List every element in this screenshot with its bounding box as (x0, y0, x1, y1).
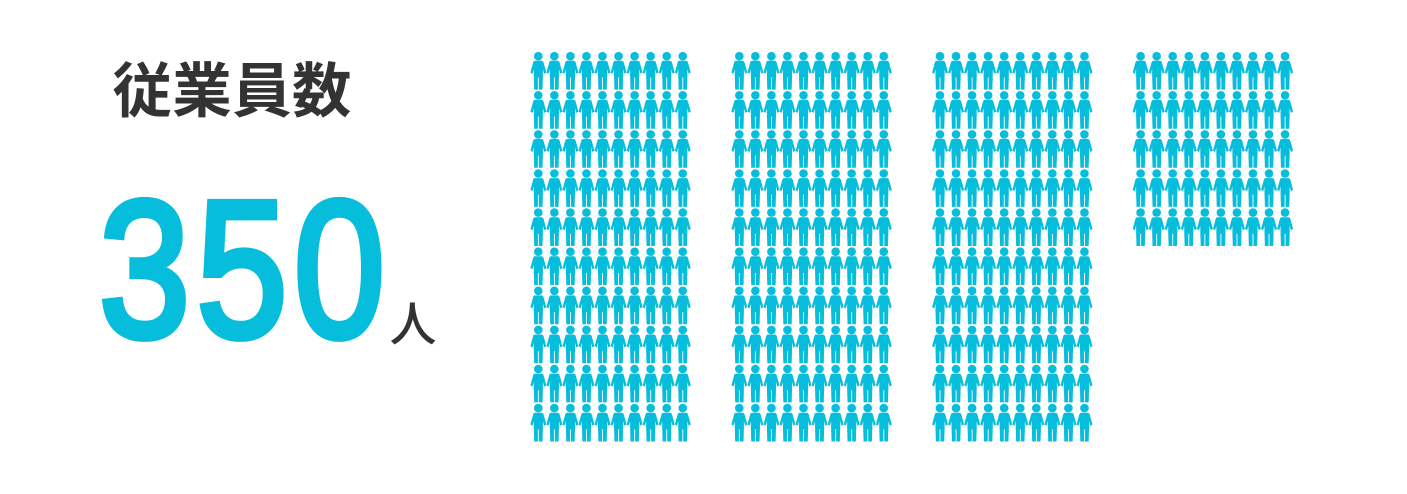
heading: employee count: 従業員数 (112, 58, 352, 125)
pictogram: block of 100 people, first (530, 52, 691, 442)
pictogram: block of 50 people (1133, 52, 1293, 246)
pictogram: block of 100 people, third (932, 52, 1092, 442)
big number: 350: 350 (99, 161, 385, 379)
pictogram: block of 100 people, second (731, 52, 892, 442)
unit: people: 人 (390, 298, 436, 351)
